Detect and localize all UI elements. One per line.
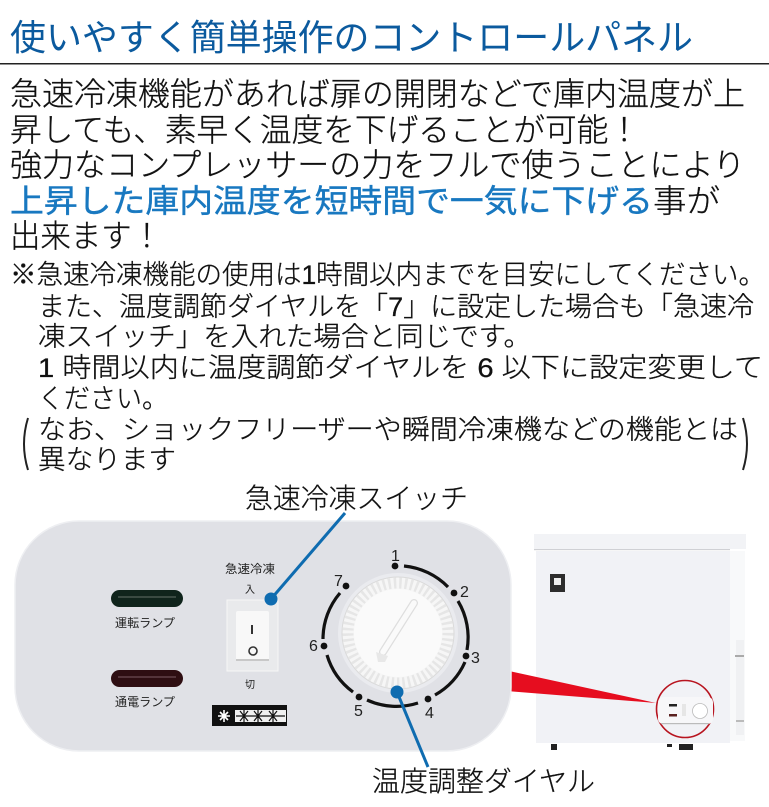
switch caption: 急速冷凍 [225,561,275,576]
dial scale dots and numbers: 1 [391,548,400,565]
red power lamp [111,670,183,687]
dial scale dots and numbers: 7 [334,573,343,590]
text block: notes: 異なります [38,445,176,475]
freezer star mark [212,705,287,726]
label: temperature dial: 温度調整ダイヤル [372,766,595,797]
rocker switch [227,600,278,671]
green running lamp [111,590,183,607]
temperature dial knob [338,573,458,693]
text block: main description: 昇しても、素早く温度を下げることが可能！ [10,112,640,148]
dial scale dots and numbers: 5 [354,703,363,720]
off label: 切 [245,679,255,691]
text block: notes: 凍スイッチ」を入れた場合と同じです。 [38,322,531,352]
text block: notes: ください。 [38,384,168,414]
text block: main description: 上昇した庫内温度を短時間で一気に下げる [10,183,653,219]
freezer product [534,534,746,750]
text block: notes [10,260,765,475]
feet [551,744,693,750]
dial scale dots and numbers [309,548,480,722]
text block: main description [10,76,745,254]
callout line: dial [390,686,428,767]
text block: notes: また、温度調節ダイヤルを「7」に設定した場合も「急速冷 [38,292,754,322]
callout line: switch [264,513,345,606]
text block: main description: 出来ます！ [10,218,162,254]
dial scale ring [323,566,468,706]
text block: notes: なお、ショックフリーザーや瞬間冷凍機などの機能とは [38,415,738,445]
right bracket [743,418,747,470]
dial scale dots and numbers: 4 [425,705,434,722]
red zoom wedge [507,671,656,703]
dial scale dots and numbers: 6 [309,638,318,655]
dial scale dots and numbers: 2 [460,584,469,601]
brand logo [550,574,565,592]
text block: notes: 1 時間以内に温度調節ダイヤルを 6 以下に設定変更して [38,353,763,383]
left bracket [24,418,28,470]
text block: main description: 急速冷凍機能があれば扉の開閉などで庫内温度が上 [10,76,745,112]
control panel [15,521,511,751]
text block: notes: ※急速冷凍機能の使用は1時間以内までを目安にしてください。 [10,260,765,290]
label: quick freeze switch: 急速冷凍スイッチ [245,483,468,514]
running lamp label: 運転ランプ [115,616,175,630]
dial scale dots and numbers: 3 [471,650,480,667]
on label: 入 [245,585,255,596]
power lamp label: 通電ランプ [115,695,175,709]
text block: main description: 強力なコンプレッサーの力をフルで使うことにより [10,147,745,183]
title: 使いやすく簡単操作のコントロールパネル [10,17,693,58]
red zoom circle with mini panel [656,680,714,738]
text block: main description: 事が [653,183,720,219]
